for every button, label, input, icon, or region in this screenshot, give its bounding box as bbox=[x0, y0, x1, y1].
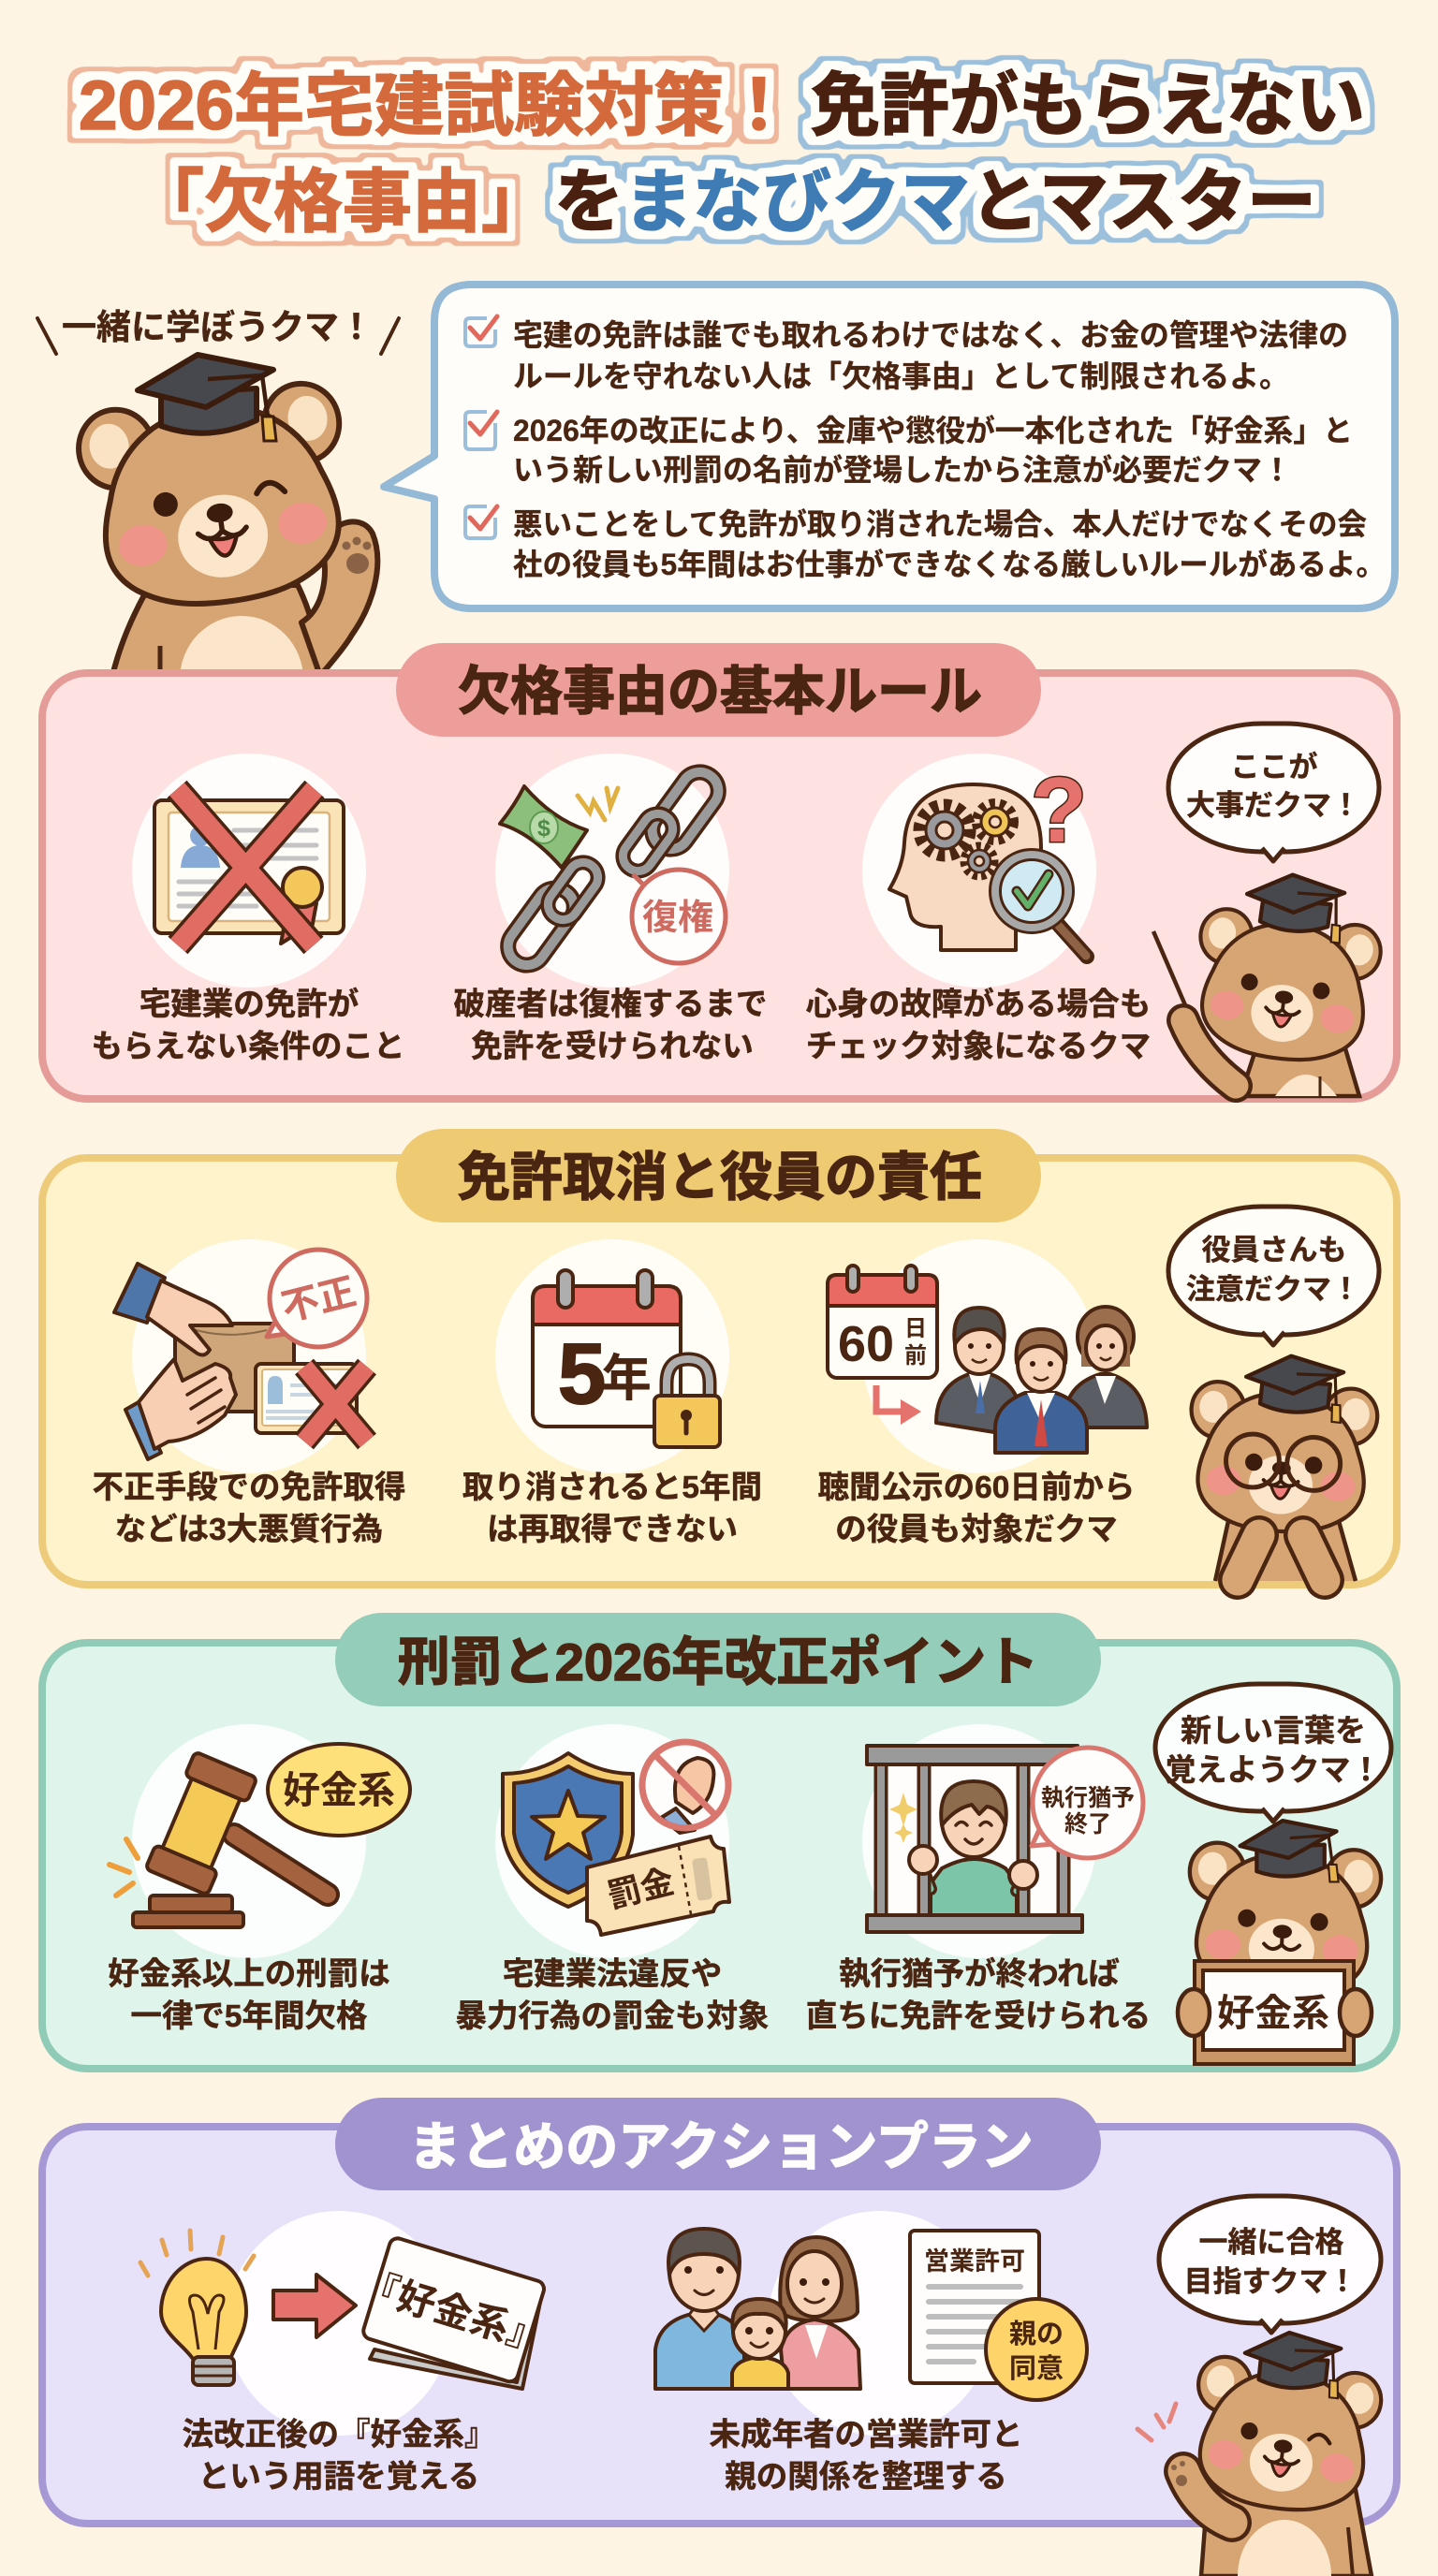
icon: crossed-out certificate bbox=[154, 789, 344, 945]
icon: family bbox=[655, 2229, 860, 2389]
title: 2026年宅建試験対策！ bbox=[79, 66, 794, 144]
captions: 聴聞公示の60日前から bbox=[818, 1471, 1135, 1505]
bear greeting: 一緒に学ぼうクマ bbox=[37, 308, 399, 743]
icon: hands passing package, licence and X: 不正 bbox=[277, 1271, 360, 1329]
sign: 好金系: 好金系 bbox=[1217, 1993, 1329, 2034]
checklist item 2: いう新しい刑罰の名前が登場したから注意が必要だクマ！ bbox=[513, 453, 1292, 487]
icon: police badge, no-violence sign, fine ticket: 罰金 bbox=[603, 1862, 678, 1915]
icon: money and broken chain with 復権 bubble: 復権 bbox=[642, 899, 713, 938]
captions: 法改正後の『好金系』 bbox=[182, 2418, 496, 2452]
panel: 欠格事由の基本ルール bbox=[42, 643, 1397, 1099]
captions: 好金系以上の刑罰は bbox=[108, 1957, 390, 1992]
bear with glasses bbox=[1185, 1352, 1379, 1581]
icon: light bulb with rays bbox=[140, 2231, 254, 2385]
icon: 60日前 calendar and officers: 60 bbox=[838, 1316, 894, 1372]
icon: gavel with 好金系 badge bbox=[110, 1744, 410, 1927]
icon: 営業許可 document with 親の同意 stamp: 営業許可 bbox=[924, 2247, 1025, 2276]
icon: 好金系 flash card: 『好金系』 bbox=[355, 2263, 551, 2361]
captions: 取り消されると5年間 bbox=[462, 1471, 762, 1505]
checklist item 2 bbox=[465, 412, 1353, 487]
captions: 破産者は復権するまで bbox=[453, 988, 768, 1022]
captions: 心身の故障がある場合も bbox=[806, 987, 1151, 1022]
captions: 執行猶予が終われば bbox=[839, 1956, 1120, 1992]
checklist item 1 bbox=[465, 316, 1348, 393]
captions: 免許を受けられない bbox=[471, 1030, 754, 1064]
captions: 親の関係を整理する bbox=[725, 2460, 1007, 2495]
heading pill: 刑罰と2026年改正ポイント bbox=[398, 1632, 1038, 1691]
bear waving arm bbox=[301, 521, 377, 676]
panel: 免許取消と役員の責任 bbox=[42, 1129, 1397, 1585]
checklist item 3: 社の役員も5年間はお仕事ができなくなる厳しいルールがあるよ。 bbox=[513, 548, 1386, 581]
panel: 刑罰と2026年改正ポイント bbox=[42, 1613, 1397, 2069]
officer: left man bbox=[936, 1374, 1022, 1432]
title bbox=[79, 66, 1365, 241]
captions: 未成年者の営業許可と bbox=[710, 2418, 1022, 2452]
icon: boy behind bars with 執行猶予終了 bubble: 執行猶予 bbox=[1041, 1785, 1135, 1811]
icon: head with gears and magnifier bbox=[889, 758, 1087, 957]
icon: gavel with 好金系 badge: 好金系 bbox=[283, 1770, 395, 1811]
officer: woman bbox=[1064, 1374, 1147, 1427]
heading pill bbox=[335, 1613, 1101, 1706]
checklist item 2: 2026年の改正により、金庫や懲役が一本化された「好金系」と bbox=[513, 414, 1353, 447]
bubble: ここが大事だクマ: 大事だクマ！ bbox=[1186, 789, 1360, 822]
captions: などは3大悪質行為 bbox=[115, 1513, 383, 1547]
bear with pointer bbox=[1153, 869, 1384, 1096]
bubble: 新しい言葉を覚えようクマ bbox=[1155, 1684, 1391, 1822]
bear holding sign bbox=[1178, 1821, 1383, 2064]
icon: 60日前 calendar and officers: 日 bbox=[904, 1316, 927, 1341]
captions: 暴力行為の罰金も対象 bbox=[455, 1999, 770, 2034]
officer: front man bbox=[995, 1393, 1087, 1453]
captions: の役員も対象だクマ bbox=[835, 1513, 1118, 1547]
checklist item 3 bbox=[465, 506, 1386, 581]
icon: 営業許可 document with 親の同意 stamp: 同意 bbox=[1009, 2353, 1064, 2384]
bubble: ここが大事だクマ bbox=[1168, 724, 1379, 861]
captions bbox=[92, 1471, 1135, 1547]
greeting text: 一緒に学ぼうクマ！ bbox=[62, 308, 374, 346]
bubble: 新しい言葉を覚えようクマ: 新しい言葉を bbox=[1181, 1713, 1366, 1748]
icon: 5年 calendar and lock bbox=[533, 1270, 720, 1447]
bubble: ここが大事だクマ: ここが bbox=[1230, 751, 1318, 783]
icon: 5年 calendar and lock: 5 bbox=[558, 1326, 606, 1422]
icon: 60日前 calendar and officers: 前 bbox=[904, 1343, 927, 1368]
heading pill bbox=[396, 1129, 1041, 1222]
icon: 営業許可 document with 親の同意 stamp: 親の bbox=[1009, 2319, 1064, 2349]
icon: police badge, no-violence sign, fine ticket bbox=[503, 1740, 730, 1935]
captions bbox=[182, 2418, 1022, 2495]
panel: まとめのアクションプラン bbox=[42, 2098, 1397, 2576]
title: 免許がもらえない bbox=[811, 66, 1365, 144]
bear hat bbox=[138, 355, 276, 441]
bubble: 一緒に合格目指すクマ: 一緒に合格 bbox=[1198, 2226, 1344, 2259]
icon: boy behind bars with 執行猶予終了 bubble: 終了 bbox=[1064, 1811, 1111, 1837]
captions: という用語を覚える bbox=[198, 2460, 479, 2495]
icon: 5年 calendar and lock: 年 bbox=[601, 1351, 652, 1407]
captions: 不正手段での免許取得 bbox=[92, 1471, 406, 1505]
captions: 宅建業の免許が bbox=[139, 987, 359, 1022]
icon: boy behind bars with 執行猶予終了 bubble bbox=[867, 1746, 1143, 1932]
sign: 好金系 bbox=[1195, 1961, 1354, 2064]
heading pill bbox=[335, 2098, 1101, 2190]
checklist item 1: ルールを守れない人は「欠格事由」として制限されるよ。 bbox=[513, 359, 1289, 393]
checklist item 1: 宅建の免許は誰でも取れるわけではなく、お金の管理や法律の bbox=[513, 318, 1348, 352]
icon: 60日前 calendar and officers bbox=[828, 1266, 1147, 1453]
icon: hands passing package, licence and X bbox=[114, 1250, 367, 1459]
captions: 宅建業法違反や bbox=[503, 1957, 722, 1992]
heading pill bbox=[396, 643, 1041, 737]
title: をまなびクマとマスター bbox=[554, 163, 1316, 241]
bubble: 新しい言葉を覚えようクマ: 覚えようクマ！ bbox=[1165, 1752, 1382, 1787]
checklist item 3: 悪いことをして免許が取り消された場合、本人だけでなくその会 bbox=[513, 507, 1367, 541]
bubble: 一緒に合格目指すクマ: 目指すクマ！ bbox=[1183, 2265, 1357, 2298]
captions: は再取得できない bbox=[487, 1513, 738, 1547]
heading pill: 免許取消と役員の責任 bbox=[458, 1148, 982, 1207]
bubble: 役員さんも注意だクマ bbox=[1168, 1207, 1379, 1345]
captions bbox=[108, 1956, 1151, 2034]
icon: 営業許可 document with 親の同意 stamp bbox=[910, 2231, 1087, 2400]
bubble: 役員さんも注意だクマ: 役員さんも bbox=[1202, 1234, 1346, 1266]
title: 「欠格事由」 bbox=[135, 163, 550, 241]
captions: 直ちに免許を受けられる bbox=[806, 1999, 1151, 2034]
captions bbox=[92, 987, 1151, 1064]
icon: head with gears and magnifier: ? bbox=[1031, 758, 1087, 861]
heading pill: 欠格事由の基本ルール bbox=[458, 662, 982, 721]
captions: チェック対象になるクマ bbox=[806, 1030, 1151, 1064]
heading pill: まとめのアクションプラン bbox=[408, 2117, 1034, 2176]
icon: money and broken chain with 復権 bubble bbox=[500, 765, 726, 973]
bear head bbox=[74, 379, 362, 620]
icon: 好金系 flash card bbox=[346, 2232, 561, 2389]
captions: 一律で5年間欠格 bbox=[130, 1999, 368, 2034]
bubble: 役員さんも注意だクマ: 注意だクマ！ bbox=[1186, 1273, 1360, 1306]
bear body bbox=[112, 585, 320, 676]
captions: もらえない条件のこと bbox=[92, 1030, 404, 1064]
panel: intro speech bubble bbox=[384, 285, 1395, 608]
bubble: 一緒に合格目指すクマ bbox=[1159, 2196, 1381, 2333]
bear waving, overflowing panel bbox=[1137, 2328, 1385, 2576]
icon: money and broken chain with 復権 bubble: $ bbox=[537, 815, 550, 842]
arrow bbox=[273, 2275, 356, 2337]
